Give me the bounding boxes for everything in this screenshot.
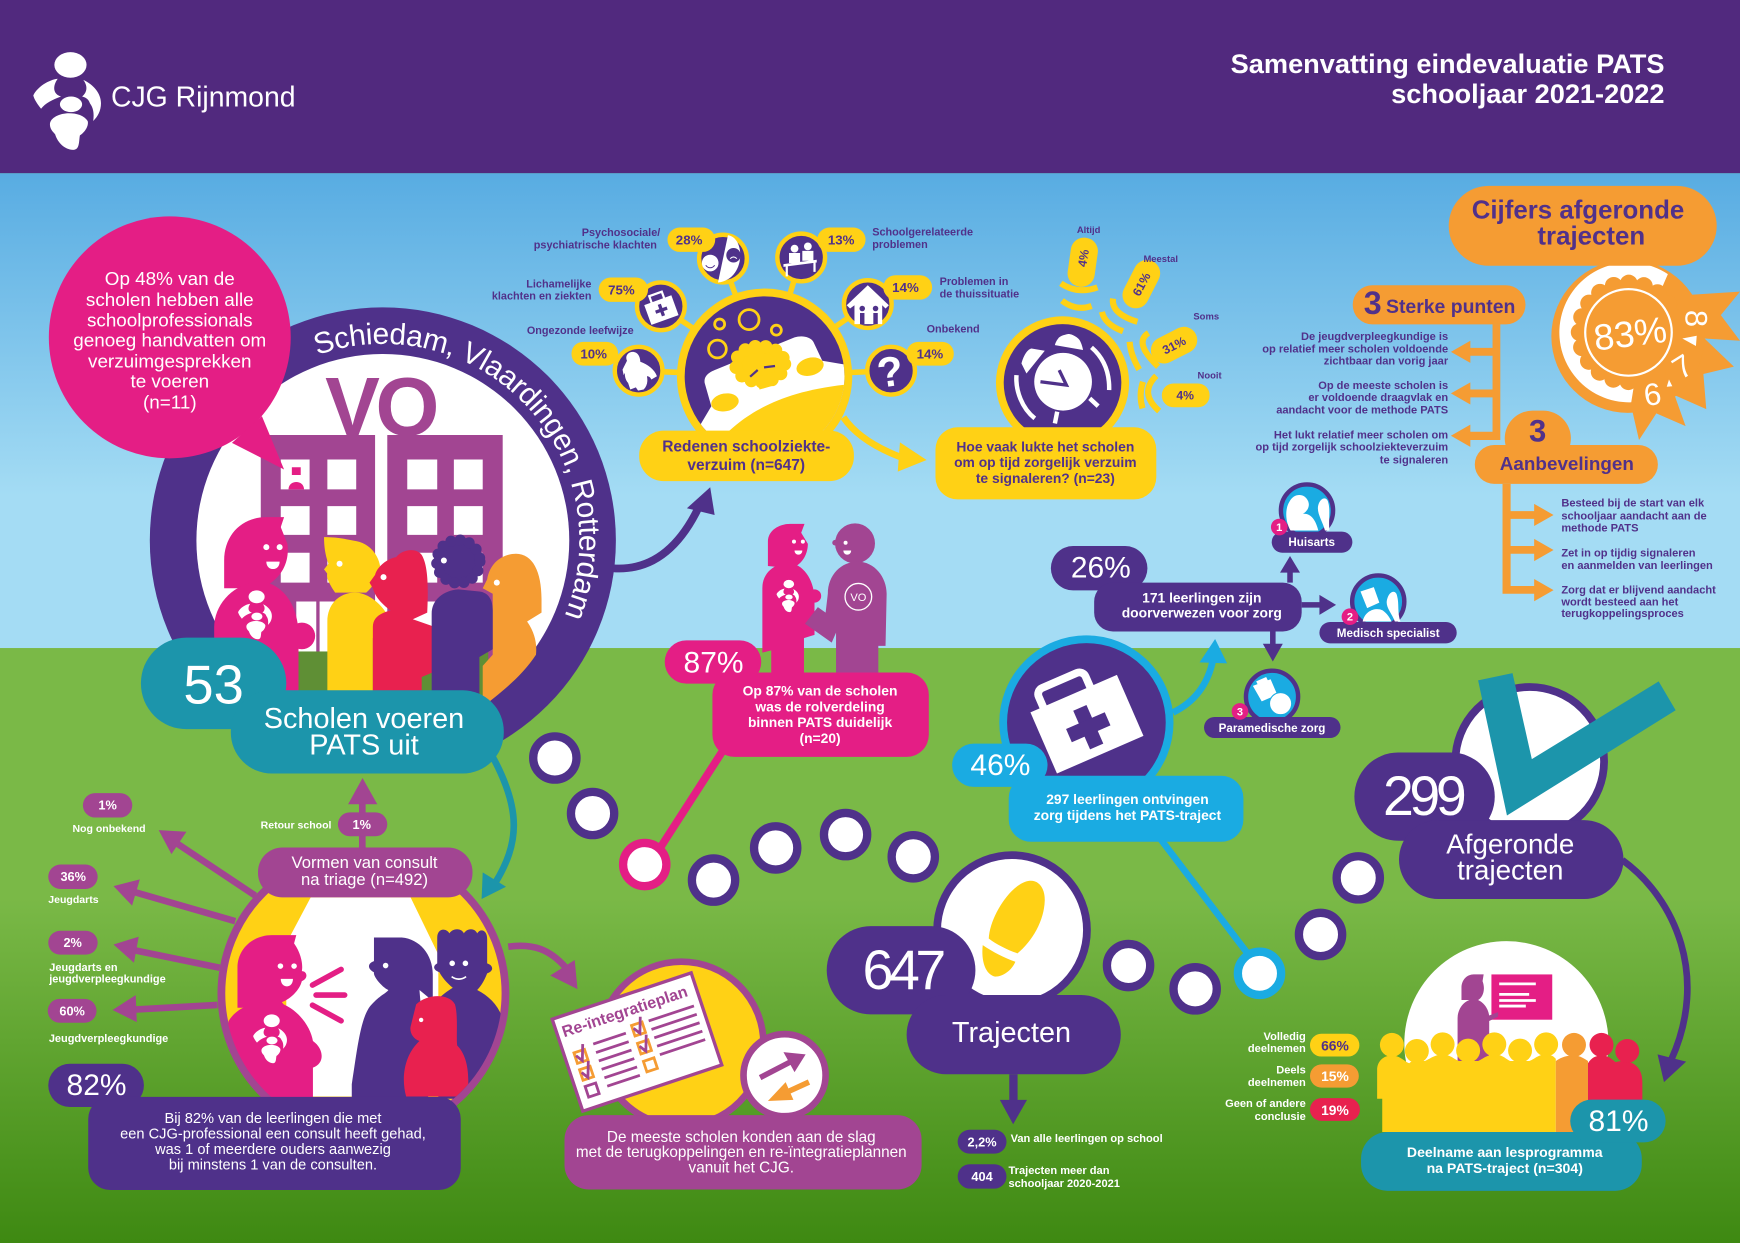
frequency labels — [1077, 224, 1222, 380]
callout: 46% care: zorg tijdens het PATS-traject — [1034, 807, 1222, 823]
figure: pink CJG professional — [214, 517, 315, 694]
stat pill: 299: 299 — [1383, 765, 1465, 827]
recommendations text — [1560, 498, 1716, 620]
speech bubble: 48%: scholen hebben alle — [86, 289, 254, 310]
reason labels — [492, 227, 1019, 337]
callout: 26% referral — [1051, 546, 1302, 631]
connector: blue line — [1160, 838, 1252, 959]
frequency pills — [1066, 236, 1210, 407]
icon: sleeping child in bed — [676, 288, 852, 431]
pill: forms of consult heading: na triage (n=492) — [301, 870, 428, 889]
question box — [935, 427, 1156, 499]
figure: role clarity pair — [762, 523, 887, 673]
pill: jeugdverpleegkundige — [48, 999, 168, 1045]
referral: huisarts: 1 — [1276, 522, 1282, 534]
percentage values: 28% — [676, 233, 703, 248]
detail: 404: 404 — [971, 1169, 994, 1184]
speech bubble: 48%: (n=11) — [143, 391, 197, 412]
callout: 46% care: 297 leerlingen ontvingen — [1046, 791, 1209, 807]
frequency values: 4% — [1176, 389, 1194, 403]
strengths text: te signaleren — [1380, 454, 1448, 466]
heading pill: 3 strengths: 3 — [1364, 285, 1382, 321]
callout: reintegration text — [565, 1115, 922, 1190]
panel: care during trajectory — [952, 484, 1457, 995]
icon: footprint — [937, 855, 1087, 1005]
reason labels: Psychosociale/ — [582, 227, 660, 239]
heading pill: 3 recommendations: 3 — [1529, 414, 1546, 449]
pill: jeugdarts: Jeugdarts — [48, 894, 99, 906]
title: Samenvatting eindevaluatie PATS — [1231, 48, 1665, 79]
detail: 2,2% — [958, 1130, 1163, 1154]
callout: 26% referral: 171 leerlingen zijn — [1142, 590, 1261, 606]
stat pill: 647: Trajecten — [952, 1017, 1071, 1049]
pill: retour school — [261, 812, 387, 836]
figure: pink nurse — [222, 935, 322, 1099]
figure: school representative: VO — [850, 592, 867, 604]
heading pill: 3 recommendations: Aanbevelingen — [1500, 453, 1634, 474]
arrow: to class participation — [1622, 860, 1687, 1082]
connector: pink line — [656, 751, 722, 855]
reason labels: Onbekend — [927, 323, 980, 335]
icon: consult scene — [221, 851, 505, 1135]
figure: red child — [404, 996, 468, 1097]
legend labels: conclusie — [1255, 1111, 1306, 1123]
callout: 26% referral: doorverwezen voor zorg — [1122, 605, 1282, 621]
frequency values: 31% — [1160, 334, 1188, 357]
icon: school building: VO — [325, 362, 436, 453]
arrows: recommendations tree — [1503, 484, 1554, 601]
frequency values — [1075, 248, 1194, 403]
callout: 81% participation: Deelname aan lesprogramma — [1407, 1144, 1603, 1160]
icon: alarm clock — [996, 316, 1129, 449]
pill: jeugdarts — [48, 865, 99, 906]
pill: jeugdarts: 36% — [60, 869, 86, 884]
arrows: referral directions — [1263, 556, 1336, 661]
heading pill: reasons: Redenen schoolziekte- — [662, 439, 830, 456]
strengths text: zichtbaar dan vorig jaar — [1324, 355, 1449, 367]
legend labels: deelnemen — [1248, 1077, 1306, 1089]
stat: 53 schools: 53 — [183, 655, 244, 716]
referral: medisch specialist: 2 — [1347, 612, 1353, 624]
stat pill: 647: 647 — [863, 939, 944, 1001]
pill: nog onbekend: 1% — [98, 798, 117, 813]
logo: CJG Rijnmond: CJG Rijnmond — [111, 82, 296, 114]
legend labels — [1225, 1031, 1306, 1123]
heading pill: cijfers — [1449, 186, 1717, 266]
speech bubble: 48% — [49, 216, 291, 469]
figure: school representative — [805, 523, 887, 673]
stat: 53 schools — [141, 638, 504, 774]
panel: reintegration plan — [552, 962, 922, 1190]
panel: completed trajectories — [1354, 673, 1687, 1082]
strengths text: er voldoende draagvlak en — [1308, 392, 1448, 404]
pill: nog onbekend — [72, 793, 146, 835]
referral: huisarts — [1271, 484, 1352, 553]
icon: psychosocial faces — [699, 235, 747, 282]
curved heading: cities: Schiedam, Vlaardingen, Rotterdam — [314, 322, 599, 618]
arrow: teal to triage — [482, 757, 514, 899]
trail node: blue — [1238, 952, 1281, 995]
arrows: consult outcomes — [128, 799, 362, 1010]
callout: 82% parents present: 82% — [67, 1069, 127, 1102]
icon: report-card badge: 83% — [1591, 309, 1669, 359]
figure: purple parent — [352, 937, 433, 1099]
frequency labels: Nooit — [1198, 369, 1222, 380]
referral: paramedische zorg — [1204, 671, 1341, 738]
callout: 46% care — [952, 744, 1243, 842]
callout: 87% role clarity — [665, 640, 929, 757]
stat pill: 299 — [1354, 752, 1623, 899]
pill: jeugdarts en jeugdverpleegkundige: 2% — [63, 935, 82, 950]
trail node: pink — [623, 843, 666, 886]
legend labels: Deels — [1276, 1065, 1306, 1077]
signal arcs — [1061, 283, 1159, 411]
heading pill: reasons: verzuim (n=647) — [687, 457, 805, 474]
stat pill: 299: trajecten — [1457, 855, 1563, 886]
recommendations text: Zorg dat er blijvend aandacht — [1561, 584, 1716, 596]
pill: forms of consult heading: Vormen van consult — [292, 853, 438, 872]
strengths text — [1255, 331, 1449, 466]
strengths text: Het lukt relatief meer scholen om — [1274, 429, 1448, 441]
pill: nog onbekend: Nog onbekend — [72, 823, 146, 835]
reason labels: Schoolgerelateerde — [872, 227, 973, 239]
panel: reasons for absence — [492, 227, 1019, 481]
reason labels: de thuissituatie — [940, 288, 1019, 300]
logo: CJG Rijnmond — [33, 52, 296, 150]
pill: retour school: Retour school — [261, 819, 332, 831]
legend pills: 15% — [1321, 1068, 1349, 1084]
reason labels: Lichamelijke — [526, 278, 591, 290]
callout: 87% role clarity: (n=20) — [799, 730, 841, 746]
stat: 53 schools: PATS uit — [309, 730, 419, 762]
speech bubble: 48%: verzuimgesprekken — [88, 350, 252, 371]
reason labels: psychiatrische klachten — [534, 240, 657, 252]
reason labels: Problemen in — [940, 276, 1008, 288]
question box: om op tijd zorgelijk verzuim — [954, 454, 1137, 470]
arrow: schools to absence reasons — [613, 487, 715, 568]
recommendations text: terugkoppelingsproces — [1561, 608, 1684, 620]
pill: jeugdarts en jeugdverpleegkundige: jeugdverpleegkundige — [48, 974, 166, 986]
stat pill: 647 — [827, 926, 1121, 1074]
strengths text: De jeugdverpleegkundige is — [1301, 331, 1448, 343]
detail: 404: schooljaar 2020-2021 — [1008, 1178, 1120, 1190]
callout: 87% role clarity: 87% — [684, 647, 744, 680]
arrows: strengths tree — [1451, 324, 1500, 447]
strengths text: Op de meeste scholen is — [1318, 380, 1448, 392]
referral: paramedische zorg: Paramedische zorg — [1219, 722, 1325, 735]
callout: 46% care: 46% — [970, 749, 1030, 782]
connector spokes — [638, 257, 891, 376]
panel: 647 trajectories — [827, 855, 1163, 1190]
referral: medisch specialist: Medisch specialist — [1337, 627, 1440, 640]
icon: plan document: Re-ïntegratieplan — [560, 983, 690, 1041]
pill: forms of consult heading — [258, 847, 473, 897]
callout: 82% parents present: bij minstens 1 van de consulten. — [169, 1158, 377, 1174]
legend pills: 19% — [1321, 1102, 1349, 1118]
callout: 82% parents present: was 1 of meerdere ouders aanwezig — [154, 1142, 391, 1158]
arrow: down to details — [1000, 1074, 1027, 1124]
icon: report-card badge — [1551, 260, 1740, 440]
percentage values: 10% — [580, 346, 607, 361]
callout: 82% parents present: een CJG-professional een consult heeft gehad, — [120, 1126, 426, 1142]
legend labels: deelnemen — [1248, 1043, 1306, 1055]
stat: 53 schools: Scholen voeren — [264, 703, 464, 735]
pill: jeugdarts en jeugdverpleegkundige — [48, 931, 166, 986]
detail: 404 — [958, 1164, 1120, 1190]
pill: jeugdverpleegkundige: 60% — [59, 1003, 85, 1018]
question box: te signaleren? (n=23) — [976, 470, 1115, 486]
recommendations text: schooljaar aandacht aan de — [1561, 510, 1707, 522]
dotted path: trail circles — [533, 736, 1380, 1010]
title — [1231, 48, 1665, 109]
percentage values: 14% — [917, 346, 943, 361]
speech bubble: 48%: te voeren — [130, 370, 209, 391]
heading pill: 3 strengths: Sterke punten — [1386, 296, 1515, 318]
figure: yellow person — [324, 537, 388, 694]
icon: report-card badge: 6 — [1641, 376, 1663, 413]
background: sky — [0, 173, 1740, 648]
percentage values: 13% — [828, 233, 855, 248]
percentage values: 14% — [892, 280, 919, 295]
speech bubble: 48%: genoeg handvatten om — [73, 329, 266, 350]
pill: retour school: 1% — [353, 817, 371, 832]
panel: schools circle — [150, 307, 616, 740]
icon: school building — [261, 362, 503, 707]
legend pills — [1310, 1034, 1360, 1121]
panel: figures completed trajectories — [1255, 186, 1740, 620]
icon: physical complaints — [637, 282, 685, 330]
figure: purple person — [432, 537, 493, 699]
icon: exchange arrows — [743, 1034, 826, 1116]
percentage values: 75% — [608, 283, 635, 298]
icon: school problems — [777, 234, 825, 281]
arrow: care to referral — [1173, 639, 1227, 713]
callout: 81% participation: na PATS-traject (n=304) — [1427, 1160, 1583, 1176]
percentage pills — [571, 228, 954, 366]
pill: jeugdarts en jeugdverpleegkundige: Jeugdarts en — [49, 962, 118, 974]
heading pill: reasons — [639, 431, 854, 481]
icon: unknown — [867, 347, 915, 397]
stat pill: 299: Afgeronde — [1446, 828, 1574, 859]
callout: 26% referral: 26% — [1071, 552, 1131, 585]
icon: plan document — [552, 973, 722, 1111]
arrow: consult to reintegration — [508, 946, 577, 989]
heading pill: cijfers: Cijfers afgeronde — [1472, 197, 1684, 225]
reason labels: Ongezonde leefwijze — [527, 325, 634, 337]
heading pill: cijfers: trajecten — [1537, 223, 1645, 251]
icon: medical kit — [1003, 639, 1170, 806]
icon: home situation — [844, 280, 892, 328]
referral: huisarts: Huisarts — [1288, 536, 1335, 549]
figure: orange person — [483, 554, 542, 707]
percentage values — [580, 233, 943, 361]
callout: 82% parents present: Bij 82% van de leerlingen die met — [164, 1111, 382, 1127]
panel: alarm clock signal question — [935, 224, 1222, 499]
recommendations text: Besteed bij de start van elk — [1561, 498, 1705, 510]
icon: unhealthy lifestyle — [615, 347, 662, 395]
figure: purple teen — [434, 929, 502, 1099]
speech bubble: 48%: Op 48% van de — [105, 268, 235, 289]
heading pill: 3 recommendations — [1475, 411, 1658, 484]
callout: 87% role clarity: was de rolverdeling — [754, 698, 885, 714]
title: schooljaar 2021-2022 — [1391, 78, 1665, 109]
reason labels: klachten en ziekten — [492, 291, 591, 303]
frequency labels: Altijd — [1077, 224, 1101, 235]
heading pill: 3 strengths — [1353, 285, 1525, 324]
detail: 2,2%: 2,2% — [968, 1134, 997, 1149]
background: grass — [0, 648, 1740, 1243]
frequency labels: Meestal — [1143, 253, 1178, 264]
question box: Hoe vaak lukte het scholen — [956, 439, 1134, 455]
speech lines — [312, 969, 345, 1021]
callout: 82% parents present — [48, 1064, 461, 1190]
callout: 87% role clarity: Op 87% van de scholen — [743, 682, 897, 698]
callout: reintegration text: De meeste scholen konden aan de slag — [607, 1129, 876, 1146]
callout: 87% role clarity: binnen PATS duidelijk — [748, 714, 892, 730]
icon: report-card badge: 8 — [1679, 310, 1714, 327]
strengths text: aandacht voor de methode PATS — [1276, 404, 1448, 416]
figure: red person — [370, 550, 435, 694]
figure: pink professional — [762, 524, 821, 673]
icon: big check mark — [1455, 673, 1676, 836]
icon: unknown: ? — [874, 347, 906, 397]
arrow: reasons to signal question — [843, 417, 927, 472]
callout: 81% participation: 81% — [1589, 1105, 1648, 1138]
legend labels: Geen of andere — [1225, 1098, 1306, 1110]
callout: reintegration text: vanuit het CJG. — [689, 1160, 794, 1177]
frequency values: 4% — [1075, 248, 1092, 268]
pill: jeugdverpleegkundige: Jeugdverpleegkundige — [49, 1033, 168, 1045]
icon: teacher and audience — [1377, 941, 1642, 1145]
legend pills: 66% — [1321, 1037, 1349, 1053]
frequency labels: Soms — [1193, 311, 1219, 322]
strengths text: op tijd zorgelijk schoolziekteverzuim — [1255, 441, 1448, 453]
recommendations text: Zet in op tijdig signaleren — [1561, 548, 1696, 560]
recommendations text: methode PATS — [1561, 523, 1638, 535]
callout: reintegration text: met de terugkoppelingen en re-ïntegratieplannen — [576, 1144, 907, 1161]
recommendations text: wordt besteed aan het — [1560, 596, 1679, 608]
recommendations text: en aanmelden van leerlingen — [1561, 560, 1713, 572]
speech bubble: 48%: schoolprofessionals — [87, 309, 253, 330]
referral: paramedische zorg: 3 — [1237, 706, 1243, 718]
panel: forms of consult — [48, 778, 505, 1190]
frequency values: 61% — [1130, 270, 1154, 298]
callout: 81% participation — [1361, 1100, 1666, 1191]
panel: class participation — [1225, 941, 1666, 1191]
arrowheads: consult outcomes — [113, 778, 377, 1022]
reason labels: problemen — [872, 239, 928, 251]
legend labels: Volledig — [1264, 1031, 1306, 1043]
icon: report-card badge: 7 — [1666, 347, 1699, 386]
detail: 2,2%: Van alle leerlingen op school — [1011, 1133, 1163, 1145]
referral: medisch specialist — [1319, 575, 1457, 643]
header band — [0, 0, 1740, 173]
detail: 404: Trajecten meer dan — [1008, 1165, 1110, 1177]
strengths text: op relatief meer scholen voldoende — [1262, 343, 1448, 355]
